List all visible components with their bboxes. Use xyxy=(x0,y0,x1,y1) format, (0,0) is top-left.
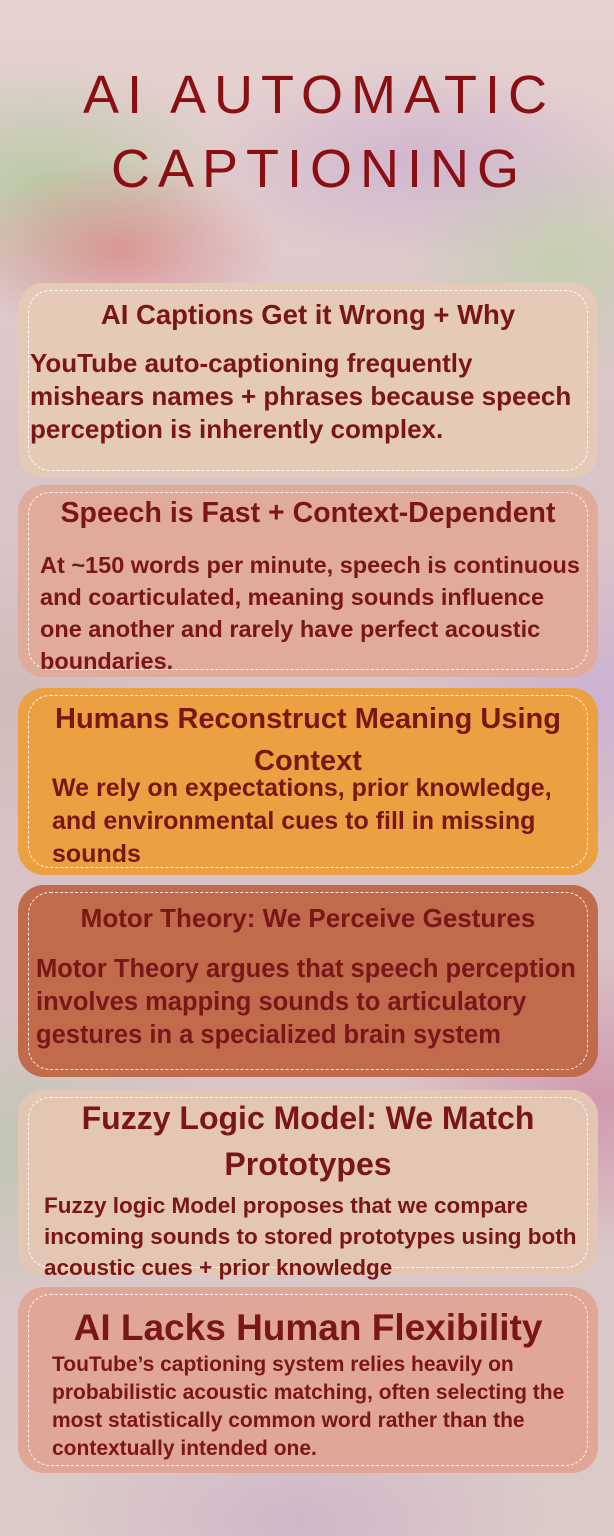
text block: At ~150 words per minute, speech is continuous xyxy=(40,552,580,578)
text block: Motor Theory argues that speech perception xyxy=(36,955,576,983)
text block: probabilistic acoustic matching, often selecting the xyxy=(52,1381,564,1404)
text block: most statistically common word rather than the xyxy=(52,1409,525,1432)
panel: captions wrong xyxy=(18,283,598,478)
text block xyxy=(44,1193,576,1280)
heading xyxy=(82,1100,534,1182)
text block xyxy=(52,774,552,868)
text block: contextually intended one. xyxy=(52,1437,317,1460)
panel: motor theory xyxy=(18,885,598,1077)
text block xyxy=(40,552,580,674)
text block xyxy=(30,348,571,444)
text block: and environmental cues to fill in missing xyxy=(52,807,535,835)
text block: involves mapping sounds to articulatory xyxy=(36,988,526,1016)
text block: acoustic cues + prior knowledge xyxy=(44,1255,392,1280)
text block: one another and rarely have perfect acoustic xyxy=(40,616,540,642)
panel: speech fast xyxy=(18,485,598,677)
panel: humans reconstruct xyxy=(18,688,598,875)
text block xyxy=(36,955,576,1049)
panel: fuzzy logic xyxy=(18,1090,598,1275)
text block: gestures in a specialized brain system xyxy=(36,1021,501,1049)
text block: boundaries. xyxy=(40,648,173,674)
text block: TouTube’s captioning system relies heavily on xyxy=(52,1353,514,1376)
heading: AI Captions Get it Wrong + Why xyxy=(101,299,515,330)
heading: Motor Theory: We Perceive Gestures xyxy=(81,903,535,933)
heading: AI Lacks Human Flexibility xyxy=(74,1307,542,1348)
heading xyxy=(55,703,561,777)
text block xyxy=(52,1353,564,1460)
text block: mishears names + phrases because speech xyxy=(30,381,571,411)
text block: and coarticulated, meaning sounds influence xyxy=(40,584,544,610)
text block: perception is inherently complex. xyxy=(30,414,443,444)
panel: AI lacks flexibility xyxy=(18,1287,598,1473)
text block: Fuzzy logic Model proposes that we compare xyxy=(44,1193,528,1218)
heading: Prototypes xyxy=(224,1146,392,1182)
text block: We rely on expectations, prior knowledge, xyxy=(52,774,552,802)
heading: Fuzzy Logic Model: We Match xyxy=(82,1100,534,1136)
text block: incoming sounds to stored prototypes using both xyxy=(44,1224,576,1249)
text block: YouTube auto-captioning frequently xyxy=(30,348,472,378)
heading: Humans Reconstruct Meaning Using xyxy=(55,703,561,735)
title: AI AUTOMATIC xyxy=(83,65,555,125)
title: CAPTIONING xyxy=(111,139,527,199)
text block: sounds xyxy=(52,840,141,868)
heading: Context xyxy=(254,745,362,777)
heading: Speech is Fast + Context-Dependent xyxy=(61,497,555,529)
title xyxy=(83,65,555,199)
